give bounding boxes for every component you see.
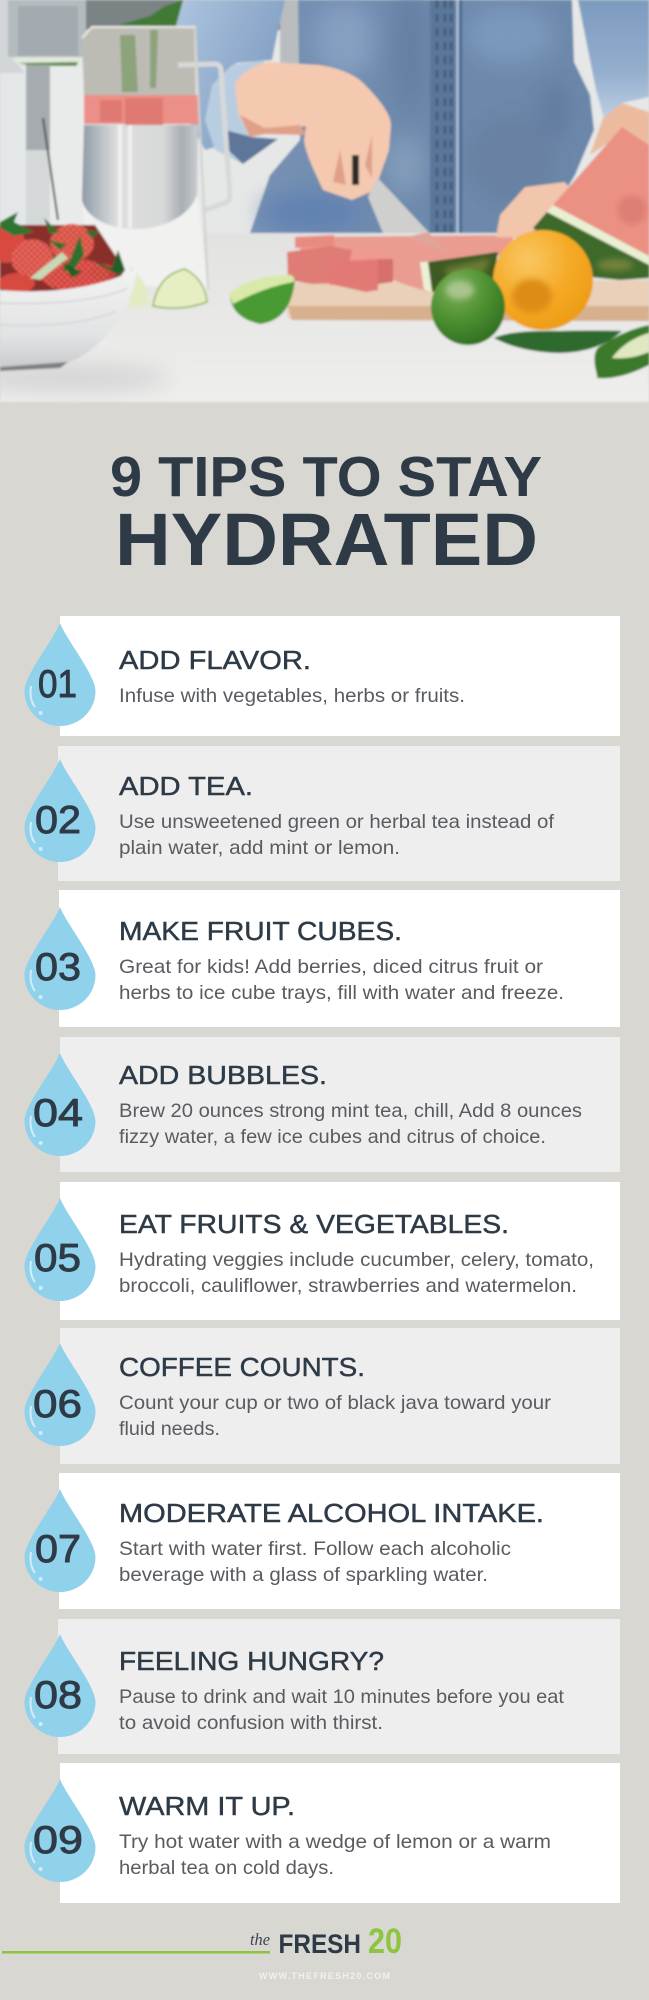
slab rind	[428, 252, 498, 292]
number 02: 02	[35, 799, 81, 842]
footer website: WWW.THEFRESH20.COM	[259, 1971, 390, 1981]
kitchen backdrop	[0, 0, 649, 240]
heading: MODERATE ALCOHOL INTAKE.	[119, 1498, 544, 1528]
body text	[119, 1686, 565, 1734]
whole lime	[431, 269, 505, 345]
card background	[59, 1473, 620, 1609]
card background	[58, 746, 620, 881]
body text: Count your cup or two of black java toward your	[119, 1392, 552, 1414]
knife blade	[368, 177, 448, 253]
heading: WARM IT UP.	[119, 1791, 295, 1821]
card background	[58, 1619, 620, 1754]
body text	[119, 1392, 552, 1440]
panel: tip 01	[24, 616, 620, 736]
heading: ADD TEA.	[119, 771, 253, 801]
knife tip over slab	[407, 232, 448, 253]
watermelon band	[84, 95, 200, 124]
long jalapeño	[494, 330, 622, 353]
title line one: 9 TIPS TO STAY	[110, 445, 542, 509]
pitcher right wall	[195, 27, 208, 290]
icon: water drop 09	[24, 1779, 96, 1882]
white bowl	[0, 268, 137, 371]
torso of denim shirt	[250, 0, 594, 233]
logo word: the: the	[250, 1930, 270, 1949]
body text: Start with water first. Follow each alcoholic	[119, 1538, 511, 1560]
back pitcher	[8, 0, 86, 236]
body text: Pause to drink and wait 10 minutes before you eat	[119, 1686, 565, 1708]
logo word: FRESH: FRESH	[278, 1929, 361, 1959]
logo rule	[2, 1951, 270, 1954]
bowl shadow on the counter	[0, 364, 170, 392]
icon: water drop 07	[24, 1489, 96, 1592]
panel: tip 09	[24, 1763, 620, 1903]
strawberry leaves	[0, 212, 34, 236]
body text: fizzy water, a few ice cubes and citrus of choice.	[119, 1126, 546, 1148]
body text	[119, 956, 564, 1004]
icon: water drop 06	[24, 1343, 96, 1446]
counter top	[0, 233, 649, 402]
body text	[119, 1831, 551, 1879]
upper glass	[82, 27, 197, 95]
front pitcher with watermelon water	[82, 27, 230, 290]
denim shading	[260, 0, 571, 232]
heading: MAKE FRUIT CUBES.	[119, 916, 402, 946]
left sleeve	[164, 0, 285, 150]
body text: broccoli, cauliflower, strawberries and watermelon.	[119, 1275, 577, 1297]
card background	[59, 890, 620, 1027]
body text	[119, 1249, 594, 1297]
body text	[119, 1538, 511, 1586]
water reflection	[82, 125, 198, 229]
number 09: 09	[33, 1819, 83, 1862]
holding hand	[496, 182, 572, 238]
watermelon slab	[287, 235, 515, 292]
hand shading	[240, 115, 372, 185]
number 06: 06	[33, 1383, 82, 1426]
icon: water drop 05	[24, 1198, 96, 1301]
heading: EAT FRUITS & VEGETABLES.	[119, 1209, 509, 1239]
knife handle	[352, 155, 359, 185]
card background	[60, 1328, 620, 1464]
panel: tip 07	[24, 1473, 620, 1609]
left shirt cuff	[205, 60, 275, 164]
number 08: 08	[34, 1674, 82, 1717]
body text: Try hot water with a wedge of lemon or a warm	[119, 1831, 551, 1853]
heading: ADD BUBBLES.	[119, 1060, 327, 1090]
photo: hands cutting watermelon beside water pitchers	[0, 0, 649, 402]
card background	[60, 616, 620, 736]
title	[110, 445, 542, 581]
body text: to avoid confusion with thirst.	[119, 1712, 383, 1734]
cutting board	[287, 280, 649, 321]
number 03: 03	[35, 946, 81, 989]
right sleeve	[578, 0, 649, 118]
far-left pitcher	[0, 0, 26, 223]
number 01: 01	[38, 663, 77, 706]
pitcher handle	[178, 64, 230, 210]
gap behind the torso	[280, 0, 305, 66]
watermelon cube front	[330, 259, 378, 292]
body text: Infuse with vegetables, herbs or fruits.	[119, 685, 465, 707]
halved lime	[229, 275, 295, 324]
panel: tip 04	[24, 1037, 620, 1172]
icon: water drop 02	[24, 759, 96, 862]
strawberries	[0, 212, 125, 293]
panel: tip 03	[24, 890, 620, 1027]
heading: COFFEE COUNTS.	[119, 1352, 365, 1382]
body text: Brew 20 ounces strong mint tea, chill, Add 8 ounces	[119, 1100, 582, 1122]
footer logo: the Fresh 20	[2, 1922, 402, 1961]
body text	[119, 811, 555, 859]
number 04: 04	[33, 1092, 83, 1135]
icon: water drop 08	[24, 1634, 96, 1737]
panel: tip 05	[24, 1182, 620, 1320]
body text: Hydrating veggies include cucumber, celery, tomato,	[119, 1249, 594, 1271]
shirt placket	[430, 0, 458, 233]
heading: ADD FLAVOR.	[119, 645, 311, 675]
body text: herbs to ice cube trays, fill with water and freeze.	[119, 982, 564, 1004]
body text: herbal tea on cold days.	[119, 1857, 334, 1879]
icon: water drop 04	[24, 1053, 96, 1156]
panel: tip 06	[24, 1328, 620, 1464]
body text: fluid needs.	[119, 1418, 220, 1440]
body text: plain water, add mint or lemon.	[119, 837, 400, 859]
card background	[60, 1182, 620, 1320]
panel: tip 08	[24, 1619, 620, 1754]
forearm and cutting hand	[235, 62, 391, 200]
watermelon wedge	[533, 127, 649, 280]
body text: Great for kids! Add berries, diced citrus fruit or	[119, 956, 544, 978]
icon: water drop 03	[24, 907, 96, 1010]
orange	[493, 230, 593, 330]
title line two: HYDRATED	[115, 498, 538, 581]
cut jalapeño	[594, 325, 649, 378]
heading: FEELING HUNGRY?	[119, 1646, 384, 1676]
logo number: 20: 20	[368, 1922, 402, 1961]
dark background top	[85, 0, 300, 30]
top cubes	[295, 235, 334, 248]
card background	[60, 1763, 620, 1903]
lime slices behind bowl	[130, 266, 207, 308]
number 05: 05	[34, 1237, 81, 1280]
number 07: 07	[35, 1528, 81, 1571]
cuff underside	[225, 130, 278, 164]
body text: Use unsweetened green or herbal tea instead of	[119, 811, 555, 833]
right forearm	[590, 103, 649, 155]
body text: beverage with a glass of sparkling water.	[119, 1564, 488, 1586]
plant behind the pitcher	[118, 0, 183, 26]
glass base	[82, 195, 208, 290]
watermelon cube left	[287, 246, 352, 284]
card background	[60, 1037, 620, 1172]
panel: tip 02	[24, 746, 620, 881]
body text	[119, 1100, 582, 1148]
icon: water drop 01	[24, 623, 96, 726]
